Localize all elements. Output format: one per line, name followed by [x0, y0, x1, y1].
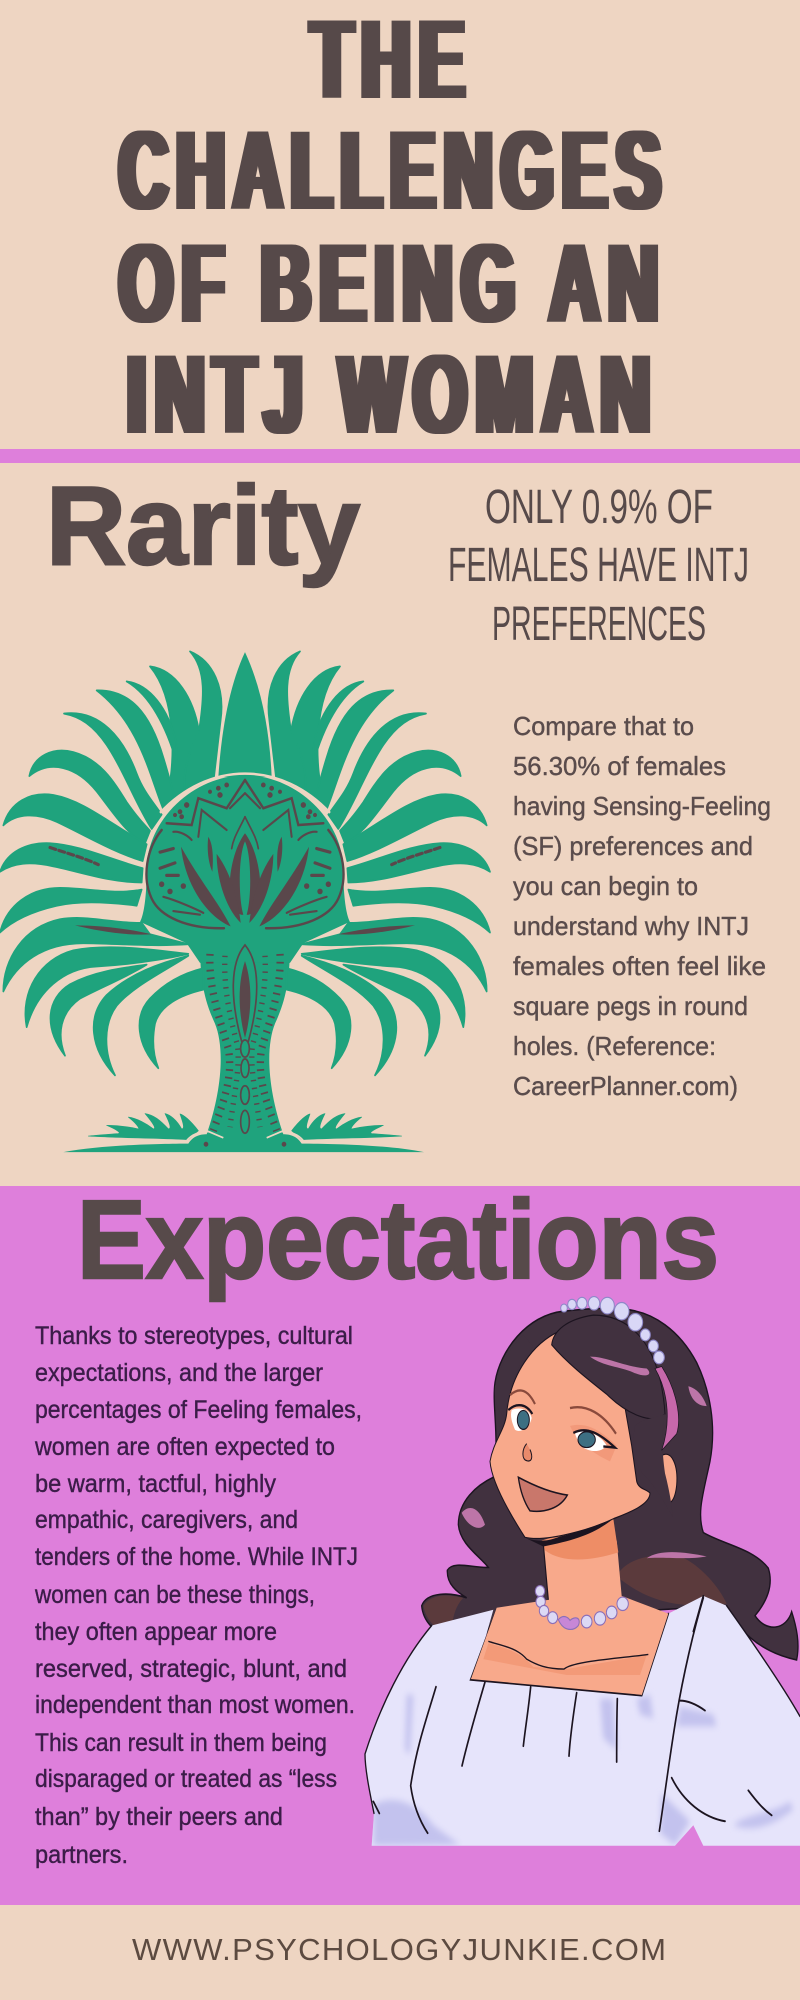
expectations body text: empathic, caregivers, and — [35, 1506, 298, 1534]
expectations body text: independent than most women. — [35, 1691, 355, 1719]
expectations body text: percentages of Feeling females, — [35, 1396, 362, 1424]
left side hair on face — [495, 1335, 533, 1418]
rarity body text: (SF) preferences and — [513, 831, 753, 861]
collarbone lines — [471, 1544, 648, 1696]
headband — [655, 1367, 679, 1450]
rarity body text: females often feel like — [513, 951, 766, 981]
expectations body text: Thanks to stereotypes, cultural — [35, 1322, 353, 1350]
cheek shade — [570, 1425, 617, 1461]
rarity statistic — [448, 481, 749, 651]
pearl necklace — [535, 1586, 628, 1629]
expectations body text: women can be these things, — [34, 1581, 315, 1609]
expectations body text: This can result in them being — [35, 1729, 327, 1757]
dress shading — [373, 1695, 793, 1846]
rarity body text: understand why INTJ — [513, 911, 749, 941]
nose — [523, 1444, 532, 1461]
rarity body text: having Sensing-Feeling — [513, 791, 771, 821]
title: THE — [311, 0, 473, 122]
expectations body text: partners. — [35, 1841, 128, 1869]
crown — [140, 775, 350, 963]
fringe — [552, 1315, 665, 1419]
expectations body text: they often appear more — [35, 1618, 277, 1646]
panel: footer — [0, 1905, 800, 2000]
ear — [662, 1454, 677, 1503]
panel: rarity — [0, 463, 800, 1186]
collarbone shadow — [483, 1643, 647, 1675]
dress outline and folds — [365, 1596, 800, 1833]
expectations body text: reserved, strategic, blunt, and — [35, 1655, 347, 1683]
hair shading — [423, 1555, 727, 1687]
side lock — [633, 1414, 673, 1517]
mouth — [518, 1477, 567, 1511]
ground line highlight — [187, 1131, 303, 1141]
expectations body text: be warm, tactful, highly — [35, 1470, 276, 1498]
expectations body text: than” by their peers and — [35, 1803, 283, 1831]
hair — [422, 1308, 798, 1687]
expectations body text: tenders of the home. While INTJ — [35, 1543, 358, 1571]
hair highlights — [462, 1357, 707, 1558]
rarity body text: Compare that to — [513, 711, 694, 741]
title — [119, 0, 669, 457]
heading: Rarity: Rarity — [46, 464, 360, 588]
jaw line — [527, 1519, 613, 1546]
expectations body text: disparaged or treated as “less — [35, 1765, 337, 1793]
expectations body text: expectations, and the larger — [35, 1359, 323, 1387]
eyes — [508, 1390, 616, 1451]
pearl headband — [561, 1297, 664, 1364]
neck shadow — [542, 1519, 618, 1560]
rarity body text: square pegs in round — [513, 991, 748, 1021]
rarity body text: you can begin to — [513, 871, 698, 901]
illustration: smiling woman with pearl headband — [365, 1297, 800, 1846]
panel: title background — [0, 0, 800, 449]
crown arc highlight — [160, 774, 330, 813]
face — [490, 1331, 650, 1538]
icon: ornamental green tree — [0, 651, 490, 1152]
trunk and base — [63, 943, 424, 1152]
dress — [365, 1596, 800, 1846]
center spear — [218, 652, 272, 777]
expectations body text — [34, 1322, 362, 1869]
panel: expectations — [0, 1178, 800, 1905]
heading: Expectations: Expectations — [77, 1178, 719, 1302]
rarity body text — [513, 711, 771, 1101]
rarity body text: CareerPlanner.com) — [513, 1071, 738, 1101]
expectations body text: women are often expected to — [34, 1433, 335, 1461]
neck and chest — [471, 1541, 668, 1696]
website url: WWW.PSYCHOLOGYJUNKIE.COM — [132, 1932, 666, 1967]
purple divider band — [0, 449, 800, 463]
lotus and trunk ornament — [50, 780, 440, 1147]
left fronds — [0, 651, 222, 1140]
right fronds — [268, 651, 490, 1140]
rarity body text: holes. (Reference: — [513, 1031, 716, 1061]
rarity body text: 56.30% of females — [513, 751, 726, 781]
